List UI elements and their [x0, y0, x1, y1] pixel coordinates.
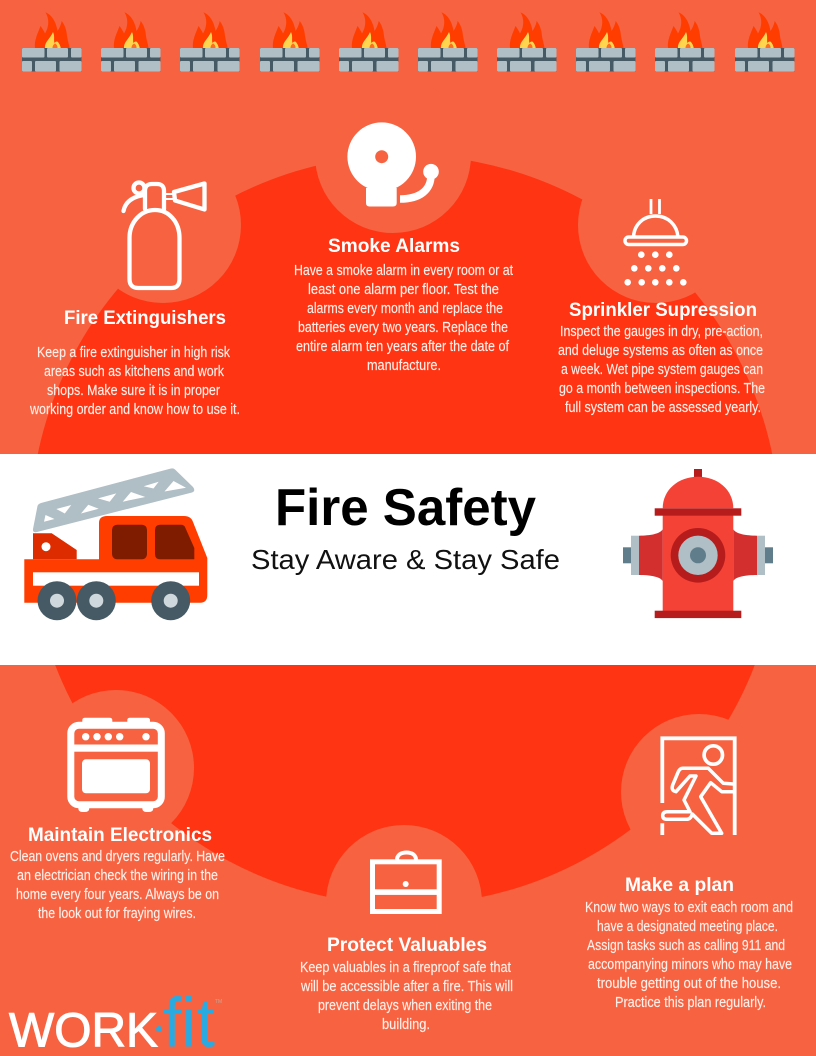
text block: smoke alarms: manufacture. [367, 357, 441, 374]
icon: sprinkler [624, 199, 687, 286]
row of firewall icons [22, 12, 794, 72]
text block: sprinkler supression: and deluge systems as often as once [558, 342, 763, 359]
text block: smoke alarms: alarms every month and replace the [307, 300, 503, 317]
text block: protect valuables: prevent delays when exiting the [318, 997, 492, 1014]
text block: maintain electronics: the look out for fraying wires. [38, 905, 196, 922]
text block: make a plan: Make a plan [625, 875, 734, 896]
text block: protect valuables: Keep valuables in a fireproof safe that [300, 959, 512, 976]
text block: make a plan: trouble getting out of the house. [597, 975, 781, 992]
text block: fire extinguishers: working order and know how to use it. [29, 401, 240, 418]
logo: workfit: TM [215, 999, 222, 1005]
text block: sprinkler supression: go a month between inspections. The [559, 380, 765, 397]
text block: protect valuables: Protect Valuables [327, 935, 487, 956]
text block: smoke alarms: Smoke Alarms [328, 236, 460, 257]
text block: smoke alarms: entire alarm ten years after the date of [296, 338, 510, 355]
icon: alarm bell [347, 122, 439, 206]
text block: maintain electronics: Clean ovens and dryers regularly. Have [10, 848, 225, 865]
text block: sprinkler supression: full system can be assessed yearly. [565, 399, 761, 416]
text block: fire extinguishers: Keep a fire extinguisher in high risk [37, 344, 230, 361]
icon backing circles [38, 77, 777, 981]
text block: protect valuables: building. [382, 1016, 430, 1033]
icon: oven [70, 718, 162, 812]
text block: maintain electronics [10, 825, 225, 922]
text block: sprinkler supression: a week. Wet pipe system gauges can [561, 361, 763, 378]
text block: sprinkler supression: Inspect the gauges in dry, pre-action, [560, 323, 763, 340]
title: Fire Safety [275, 479, 536, 537]
icon: fire truck [24, 468, 207, 620]
text block: fire extinguishers: shops. Make sure it is in proper [47, 382, 220, 399]
text block: protect valuables: will be accessible after a fire. This will [300, 978, 513, 995]
text block: make a plan: have a designated meeting place. [597, 918, 778, 935]
text block: maintain electronics: home every four years. Always be on [16, 886, 219, 903]
text block: make a plan: Practice this plan regularly. [615, 994, 766, 1011]
white title band [0, 454, 816, 665]
central red circle [30, 155, 780, 905]
text block: fire extinguishers: areas such as kitchens and work [44, 363, 224, 380]
icon: running exit [662, 738, 735, 835]
text block: maintain electronics: Maintain Electronics [28, 825, 212, 846]
text block: sprinkler supression [558, 300, 765, 416]
icon: safe briefcase [372, 852, 440, 912]
subtitle: Stay Aware & Stay Safe [251, 544, 560, 575]
text block: protect valuables [300, 935, 513, 1033]
text block: sprinkler supression: Sprinkler Supression [569, 300, 757, 321]
text block: smoke alarms: batteries every two years. Replace the [298, 319, 508, 336]
text block: smoke alarms: Have a smoke alarm in every room or at [294, 262, 514, 279]
icon: fire hydrant [623, 469, 773, 618]
text block: fire extinguishers [29, 308, 240, 418]
text block: smoke alarms [294, 236, 514, 374]
text block: fire extinguishers: Fire Extinguishers [64, 308, 226, 329]
text block: smoke alarms: least one alarm per floor. Test the [308, 281, 499, 298]
text block: maintain electronics: an electrician check the wiring in the [17, 867, 218, 884]
logo: workfit [9, 984, 222, 1056]
text block: make a plan [585, 875, 793, 1011]
icon: fire extinguisher [124, 182, 204, 288]
